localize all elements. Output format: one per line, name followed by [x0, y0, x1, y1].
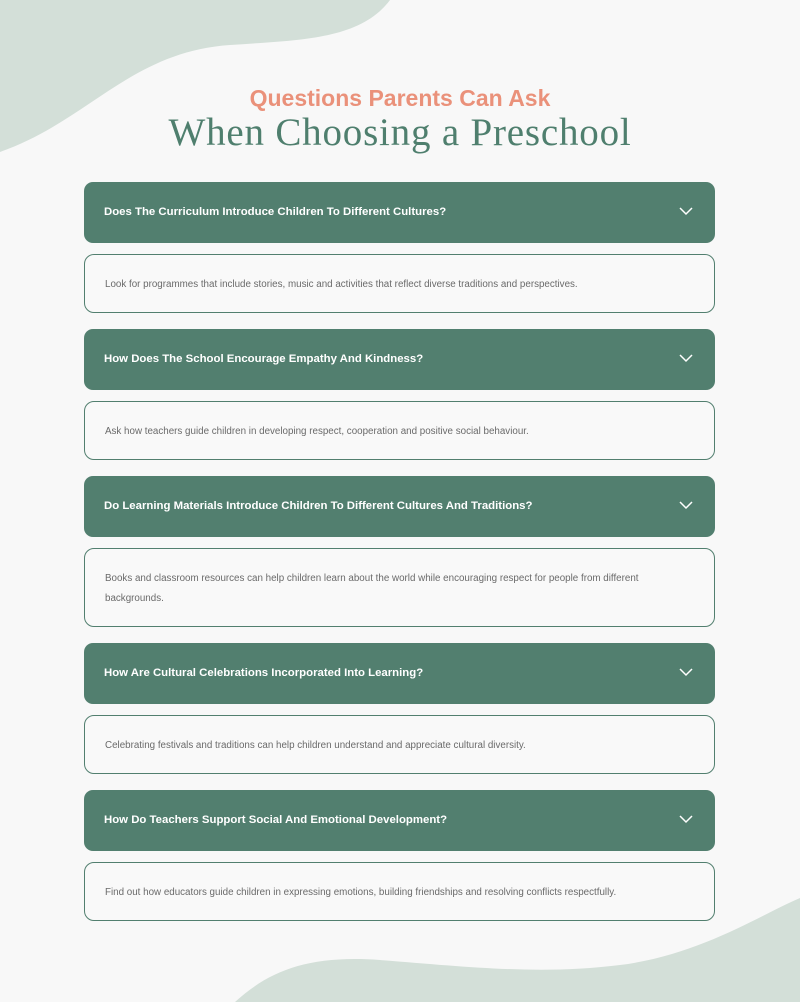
question 2: How Does The School Encourage Empathy And Kindness?	[104, 353, 423, 365]
answer 4	[84, 715, 715, 774]
question 1: Does The Curriculum Introduce Children To Different Cultures?	[104, 206, 446, 218]
answer 1: Look for programmes that include stories, music and activities that reflect diverse traditions and perspectives.	[105, 279, 578, 290]
answer 3: Books and classroom resources can help children learn about the world while encouraging respect for people from different	[105, 573, 639, 584]
answer 5	[84, 862, 715, 921]
answer 1	[84, 254, 715, 313]
title: Questions Parents Can Ask	[250, 85, 550, 111]
question 1	[84, 182, 715, 243]
answer 3: backgrounds.	[105, 593, 164, 604]
answer 2: Ask how teachers guide children in developing respect, cooperation and positive social behaviour.	[105, 426, 529, 437]
question 3	[84, 476, 715, 537]
question 5	[84, 790, 715, 851]
question 5: How Do Teachers Support Social And Emotional Development?	[104, 814, 447, 826]
question 3: Do Learning Materials Introduce Children To Different Cultures And Traditions?	[104, 500, 532, 512]
question 4	[84, 643, 715, 704]
question 4: How Are Cultural Celebrations Incorporated Into Learning?	[104, 667, 423, 679]
answer 3	[84, 548, 715, 627]
answer 5: Find out how educators guide children in expressing emotions, building friendships and resolving conflicts respectfully.	[105, 887, 616, 898]
subtitle heading: When Choosing a Preschool	[168, 111, 632, 154]
answer 2	[84, 401, 715, 460]
question 2	[84, 329, 715, 390]
answer 4: Celebrating festivals and traditions can help children understand and appreciate cultural diversity.	[105, 740, 526, 751]
